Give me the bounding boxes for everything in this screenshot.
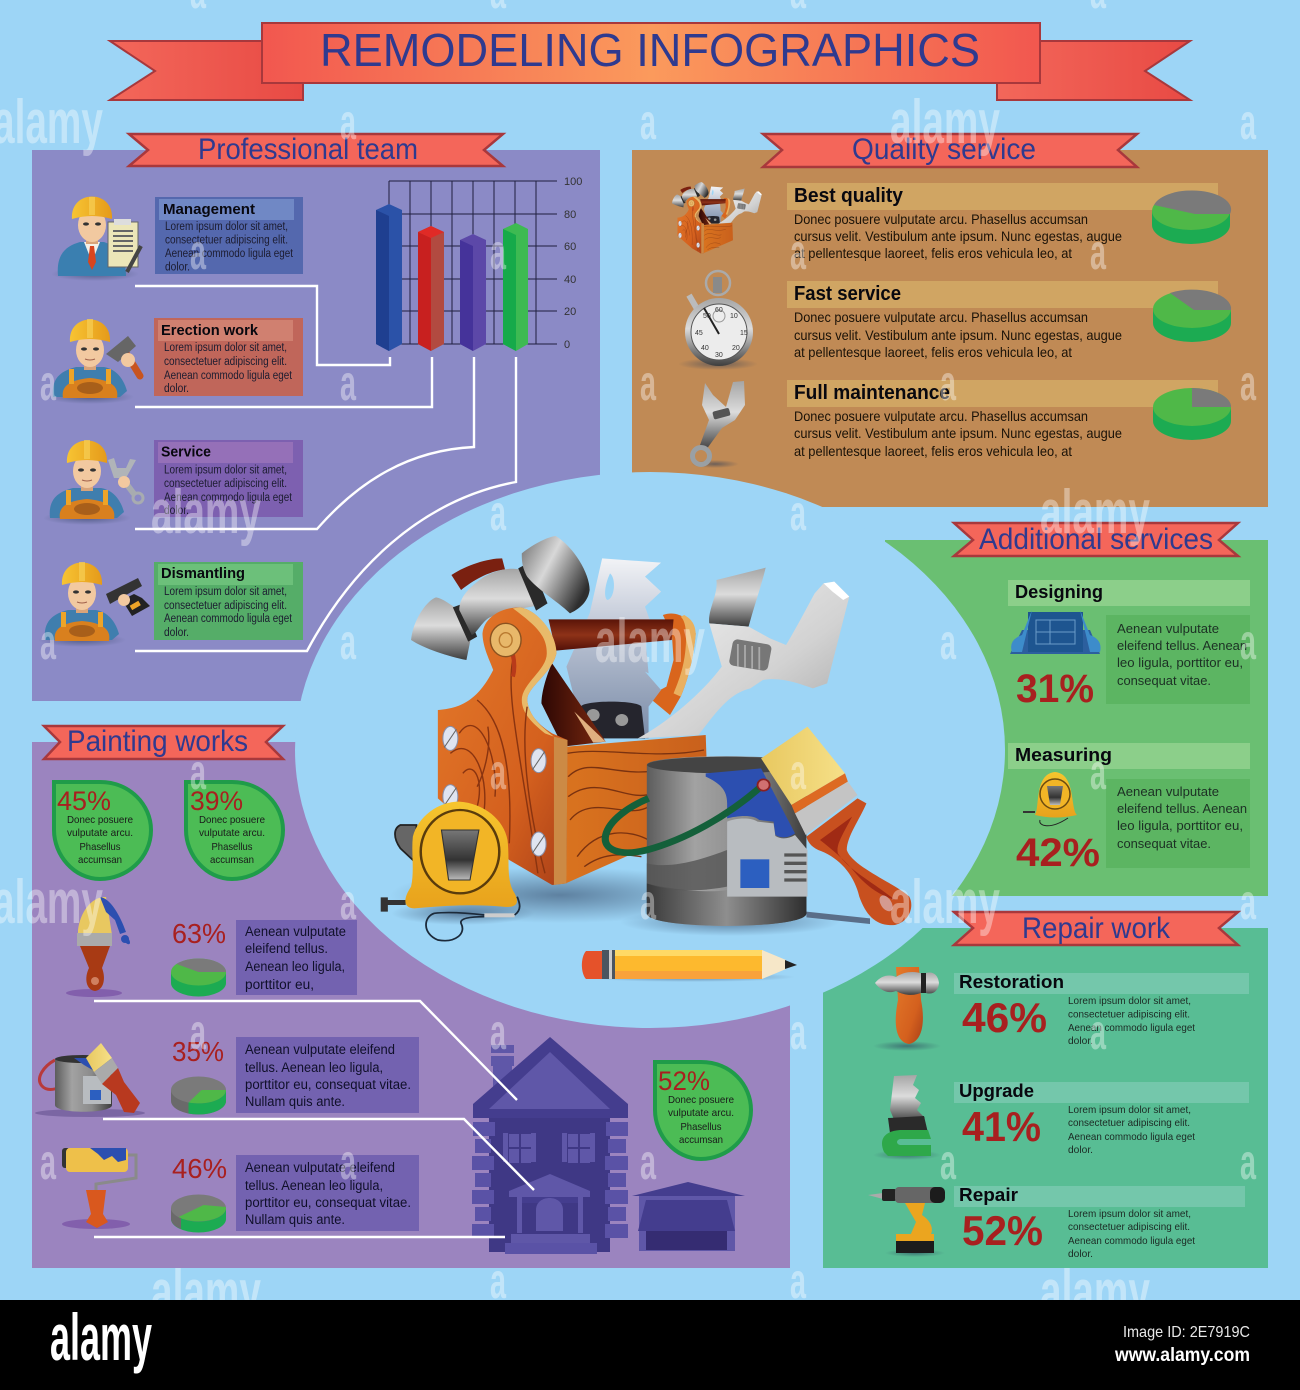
text block: erection work: dolor. [164,383,189,395]
icon: stopwatch: 50 [703,313,711,320]
icon: painted brush [66,897,130,997]
bar chart: team [376,176,582,351]
stat: 35%: 35% [172,1036,224,1067]
item: upgrade: Upgrade [959,1081,1034,1101]
heading: quality service [763,133,1137,167]
icon: saw [873,1075,941,1160]
item: restoration: consectetuer adipiscing elit. [1068,1008,1190,1020]
callout: 45%: accumsan [78,854,122,866]
watermarks: a [490,1004,507,1060]
heading: professional team: Professional team [198,133,418,166]
watermarks: a [790,1004,807,1060]
text block: painting 3: Nullam quis ante. [245,1212,345,1227]
heading: professional team [129,133,503,166]
illustration: central paint brush [761,727,911,925]
stat: 63%: 63% [172,918,226,949]
text block: painting 2 [236,1037,419,1113]
watermarks: a [40,355,57,411]
watermarks: a [190,1004,207,1060]
watermarks: a [340,355,357,411]
watermarks: a [340,614,357,670]
watermarks: a [1240,1134,1257,1190]
watermarks: a [40,1134,57,1190]
text block: erection work: Erection work [161,322,259,339]
icon: stopwatch: 60 [715,307,723,314]
callout: 39%: accumsan [210,854,254,866]
watermarks: a [790,224,807,280]
item: measuring [1008,743,1250,875]
item: upgrade: dolor. [1068,1144,1093,1156]
icon: stopwatch: 40 [701,345,709,352]
item: designing: leo ligula, porttitor eu, [1117,655,1243,670]
watermarks: a [190,224,207,280]
item bars: quality headers [787,183,1218,407]
watermarks: a [1090,744,1107,800]
item: repair: Aenean commodo ligula eget [1068,1235,1195,1247]
watermarks: a [340,874,357,930]
callout: 52%: vulputate arcu. [668,1107,734,1119]
bar chart: team: 60 [564,241,576,253]
icon: blueprint [1010,610,1101,654]
illustration: house [472,1037,628,1254]
stat: 46%: 46% [172,1153,227,1184]
connector lines: team [135,286,516,651]
text block: service: consectetuer adipiscing elit. [164,478,287,490]
watermarks: a [490,1253,507,1309]
icon: erection worker [46,319,140,404]
item: repair: Lorem ipsum dolor sit amet, [1068,1208,1191,1220]
watermarks: a [340,1134,357,1190]
watermarks: alamy [1040,478,1150,547]
watermarks: a [40,614,57,670]
text block: painting 1: eleifend tellus. [245,941,328,956]
icon: stopwatch [678,271,758,370]
item: measuring: Aenean vulputate [1117,784,1219,799]
watermarks: alamy [890,868,1000,937]
illustration: central toolbox scene [390,536,849,936]
watermarks: a [340,94,357,150]
text block: fast service: at pellentesque laoreet, felis eros vehicula leo, at [794,344,1072,360]
callout: 45%: Phasellus [80,841,120,853]
text block: service: Service [161,444,211,460]
text block: management: Aenean commodo ligula eget [165,248,294,260]
item: measuring: Measuring [1015,745,1112,765]
heading: repair work: Repair work [1022,912,1171,945]
bar chart: team: 0 [564,339,570,351]
item: restoration: Lorem ipsum dolor sit amet, [1068,995,1191,1007]
item: designing: 31% [1016,667,1094,711]
text block: dismantling [154,562,303,640]
item: restoration: Restoration [959,972,1064,992]
watermarks: alamy [151,1258,261,1327]
callout: 45%: Donec posuere [67,814,133,826]
text block: painting 3: porttitor eu, consequat vitae. [245,1195,411,1210]
text block: painting 3 [236,1155,419,1231]
pie chart: fast service [1153,290,1231,342]
stat: 63% [171,918,226,996]
text block: dismantling: dolor. [164,627,189,639]
panel: repair work background [823,928,1268,1268]
item: designing: consequat vitae. [1117,673,1211,688]
item: restoration: 46% [962,994,1047,1041]
watermarks: a [940,1134,957,1190]
watermarks: a [190,744,207,800]
title ribbon: REMODELING INFOGRAPHICS [320,24,980,76]
callout: 39%: 39% [190,786,243,816]
item: measuring: consequat vitae. [1117,836,1211,851]
watermarks: a [1240,614,1257,670]
icon: dismantling worker [38,562,150,647]
watermarks: a [490,485,507,541]
item: restoration: Aenean commodo ligula eget [1068,1022,1195,1034]
item: repair: dolor. [1068,1248,1093,1260]
icon: service worker [43,440,143,525]
icon: small tape measure [1023,772,1077,826]
text block: management [155,197,303,274]
bar chart: team: 100 [564,176,582,188]
text block: dismantling: Dismantling [161,565,245,582]
item: repair [954,1185,1245,1260]
callout: 45%: 45% [57,786,111,816]
text block: service [154,440,303,517]
footer bar: Image ID: 2E7919C [1123,1324,1250,1341]
text block: full maintenance: Donec posuere vulputate arcu. Phasellus accumsan [794,408,1088,424]
text block: painting 3: Aenean vulputate eleifend [245,1160,395,1175]
footer bar: www.alamy.com [1114,1345,1250,1366]
item: measuring: leo ligula, porttitor eu, [1117,818,1243,833]
watermarks: a [640,1134,657,1190]
text block: best quality [794,185,1122,261]
callout: 39%: vulputate arcu. [199,827,265,839]
watermarks: alamy [890,88,1000,157]
item: upgrade [954,1081,1249,1156]
illustration: garage [632,1182,745,1251]
text block: full maintenance [794,382,1122,459]
text block: service: Aenean commodo ligula eget [164,492,293,504]
item: measuring: eleifend tellus. Aenean [1117,801,1247,816]
item: upgrade: 41% [962,1103,1041,1150]
text block: management: consectetuer adipiscing elit. [165,234,288,246]
text block: management: Lorem ipsum dolor sit amet, [165,221,288,233]
watermarks: a [640,355,657,411]
text block: dismantling: consectetuer adipiscing elit. [164,600,287,612]
text block: painting 1: porttitor eu, [245,977,314,992]
watermarks: alamy [151,478,261,547]
text block: painting 1 [236,920,357,995]
icon: stopwatch: 15 [740,330,748,337]
callout: 52% [655,1062,751,1159]
text block: full maintenance: cursus velit. Vestibulum ante ipsum. Nunc egestas, augue [794,425,1122,441]
item: designing [1008,580,1250,711]
icon: paint roller [62,1148,136,1229]
footer bar: alamy [50,1300,152,1374]
text block: full maintenance: at pellentesque laoreet, felis eros vehicula leo, at [794,443,1072,459]
text block: service: dolor. [164,505,189,517]
icon: wrench [691,381,745,468]
item: measuring: 42% [1016,831,1100,875]
watermarks: a [1090,224,1107,280]
panel: additional services background [885,540,1268,896]
watermarks: a [1240,355,1257,411]
connector lines: painting [94,1001,534,1237]
watermarks: a [490,224,507,280]
item: designing: eleifend tellus. Aenean [1117,638,1247,653]
icon: stopwatch: 10 [730,313,738,320]
watermarks: alamy [1040,1258,1150,1327]
watermarks: alamy [595,607,705,676]
text block: painting 2: tellus. Aenean leo ligula, [245,1060,383,1075]
illustration: central tape measure [381,802,534,941]
watermarks: a [790,485,807,541]
heading: additional services: Additional services [979,523,1213,556]
watermarks: a [940,614,957,670]
title ribbon [110,23,1190,100]
callout: 39% [186,782,283,879]
watermarks: a [940,355,957,411]
item: restoration: dolor. [1068,1035,1093,1047]
watermarks: a [790,1253,807,1309]
item: upgrade: consectetuer adipiscing elit. [1068,1117,1190,1129]
item: repair: 52% [962,1207,1043,1254]
item: repair: Repair [959,1185,1018,1205]
icon: bucket with brush [35,1043,145,1117]
watermarks: a [1090,1004,1107,1060]
pie chart: best quality [1152,190,1231,244]
text block: painting 2: Aenean vulputate eleifend [245,1042,395,1057]
panel: quality service background [632,150,1268,507]
callout: 52%: 52% [658,1066,710,1096]
stat: 46% [171,1153,227,1232]
text block: painting 3: tellus. Aenean leo ligula, [245,1178,383,1193]
text block: fast service: Donec posuere vulputate arcu. Phasellus accumsan [794,309,1088,325]
text block: management: dolor. [165,262,190,274]
text block: fast service: Fast service [794,283,901,305]
watermarks: a [1240,874,1257,930]
footer bar [0,1300,1300,1390]
watermarks: a [640,874,657,930]
text block: painting 1: Aenean vulputate [245,924,346,939]
panel: professional team background [32,150,600,701]
icon: mini toolbox [672,182,762,254]
watermarks: a [490,744,507,800]
text block: painting 1: Aenean leo ligula, [245,959,345,974]
text block: erection work: Aenean commodo ligula eget [164,370,293,382]
bar chart: team: 40 [564,274,576,286]
callout: 52%: Donec posuere [668,1094,734,1106]
item: upgrade: Lorem ipsum dolor sit amet, [1068,1104,1191,1116]
callout: 52%: Phasellus [680,1121,722,1133]
callout: 52%: accumsan [679,1134,723,1146]
callout: 39%: Phasellus [212,841,252,853]
illustration: central paint bucket [605,756,870,926]
text block: best quality: cursus velit. Vestibulum ante ipsum. Nunc egestas, augue [794,228,1122,244]
watermarks: a [790,744,807,800]
text block: fast service: cursus velit. Vestibulum ante ipsum. Nunc egestas, augue [794,327,1122,343]
stat: 35% [171,1036,226,1114]
heading: repair work [954,912,1238,945]
icon: stopwatch: 45 [695,330,703,337]
text block: best quality: Donec posuere vulputate arcu. Phasellus accumsan [794,211,1088,227]
callout: 45%: vulputate arcu. [67,827,133,839]
icon: stopwatch: 30 [715,352,723,359]
watermarks: a [640,94,657,150]
text block: fast service [794,283,1122,360]
bar chart: team: 80 [564,209,576,221]
heading: painting works: Painting works [67,725,248,758]
text block: best quality: Best quality [794,185,904,207]
text block: full maintenance: Full maintenance [794,382,950,404]
text block: management: Management [163,201,255,218]
bar chart: team: 20 [564,306,576,318]
text block: erection work [154,318,303,396]
text block: dismantling: Aenean commodo ligula eget [164,613,293,625]
item: upgrade: Aenean commodo ligula eget [1068,1131,1195,1143]
panel: painting works background [32,742,790,1268]
icon: manager [51,196,141,281]
item: repair: consectetuer adipiscing elit. [1068,1221,1190,1233]
icon: drill [868,1187,945,1257]
item: designing: Aenean vulputate [1117,621,1219,636]
text block: dismantling: Lorem ipsum dolor sit amet, [164,586,287,598]
item: restoration [954,972,1249,1047]
icon: hammer [873,967,941,1051]
text block: best quality: at pellentesque laoreet, felis eros vehicula leo, at [794,245,1072,261]
text block: erection work: Lorem ipsum dolor sit amet, [164,342,287,354]
text block: painting 2: Nullam quis ante. [245,1094,345,1109]
callout: 39%: Donec posuere [199,814,265,826]
heading: quality service: Quality service [852,133,1036,166]
text block: erection work: consectetuer adipiscing elit. [164,356,287,368]
icon: stopwatch: 20 [732,345,740,352]
callout: 45% [54,782,151,879]
text block: painting 2: porttitor eu, consequat vitae. [245,1077,411,1092]
text block: service: Lorem ipsum dolor sit amet, [164,464,287,476]
illustration: pencil [582,950,797,982]
central ellipse cutout [295,472,1005,1028]
item: designing: Designing [1015,582,1103,602]
watermarks: a [1240,94,1257,150]
pie chart: full maintenance [1153,388,1231,440]
